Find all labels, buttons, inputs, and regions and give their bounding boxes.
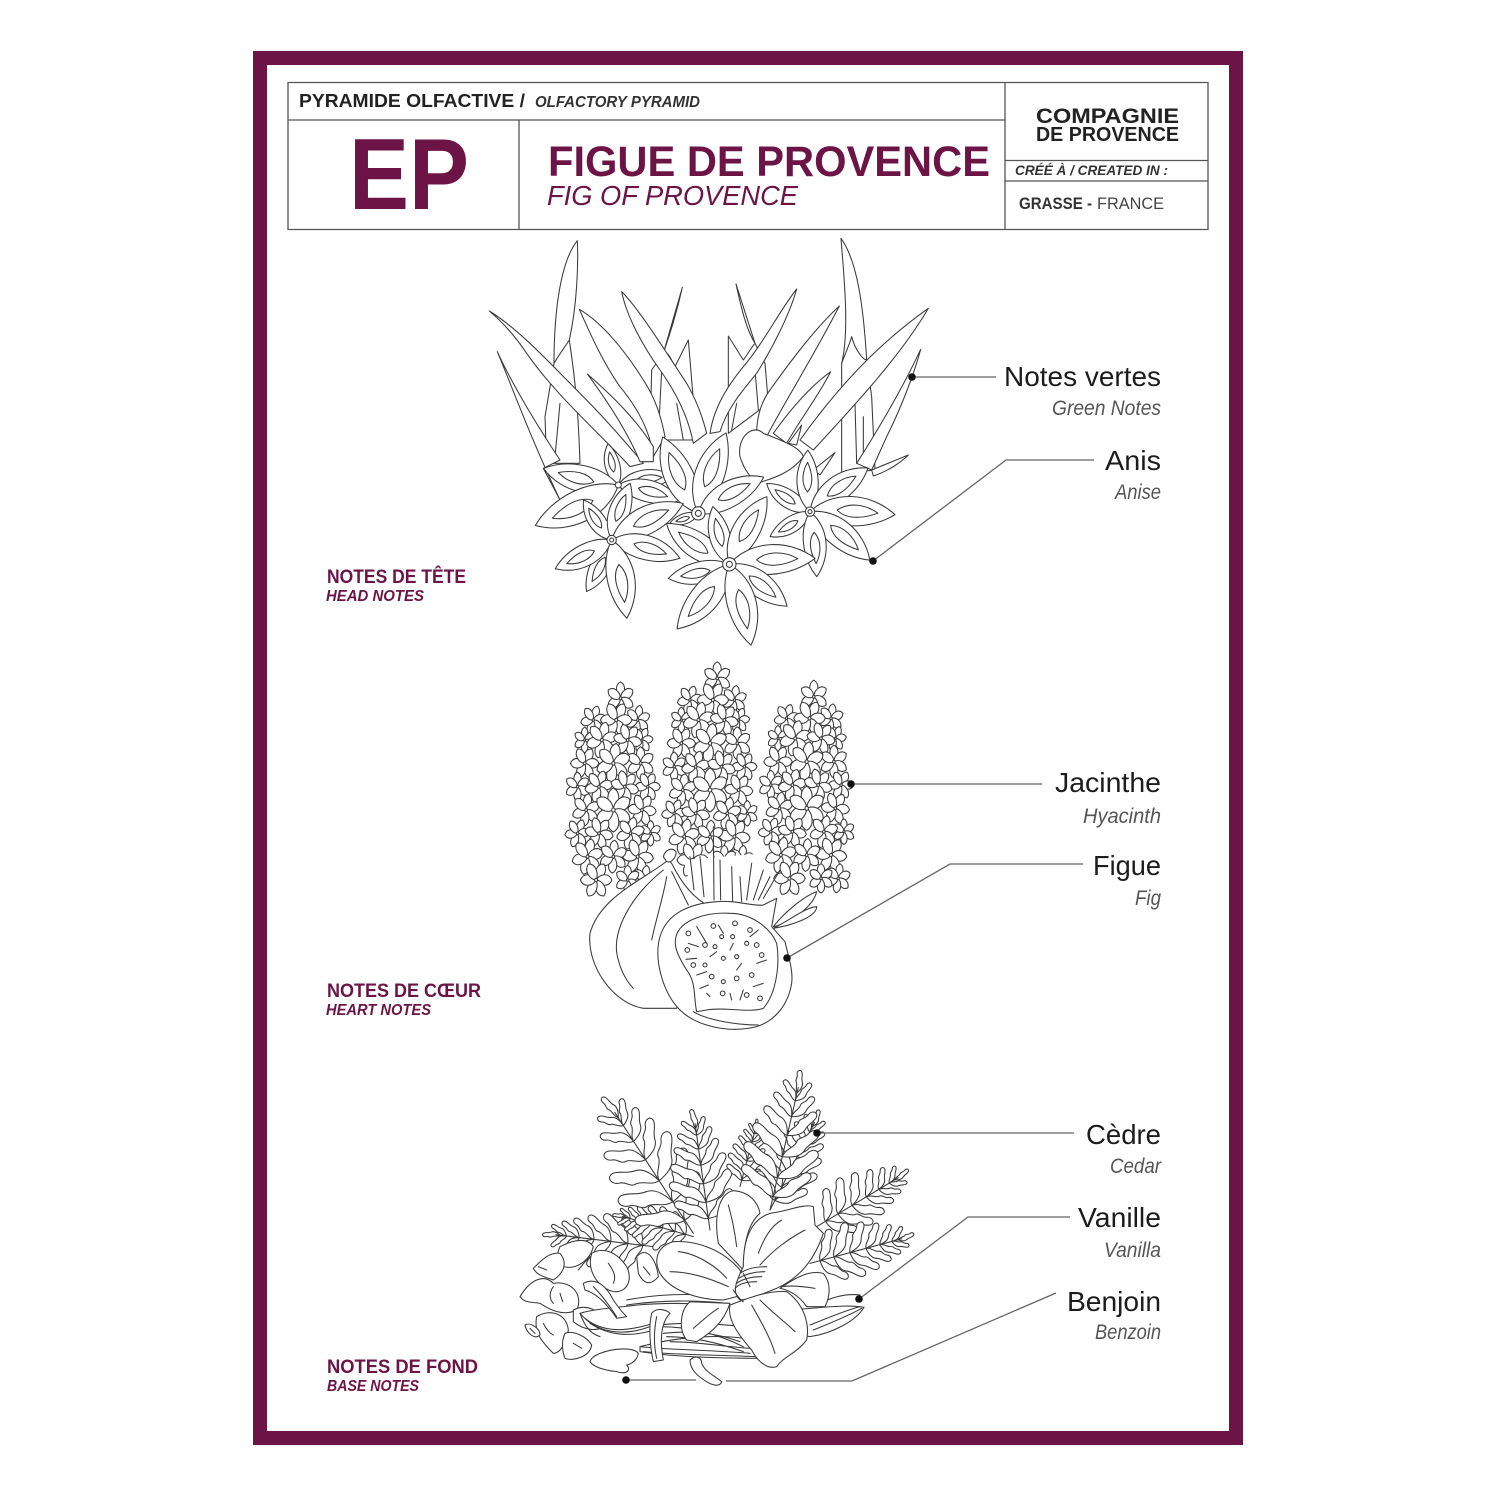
brand name <box>1036 105 1179 146</box>
callout: vanille: Vanille <box>1078 1202 1161 1233</box>
perfume title: FIG OF PROVENCE <box>547 180 798 211</box>
illustration: hyacinth and fig <box>561 662 858 1029</box>
whole fig <box>590 849 710 1008</box>
callout: anis: Anis <box>1105 445 1161 476</box>
section label: heart notes: NOTES DE CŒUR <box>327 981 481 1002</box>
header label: olfactory pyramid: PYRAMIDE OLFACTIVE / <box>299 91 525 111</box>
star anise upper petals blob <box>740 430 803 483</box>
callout: benjoin <box>622 1286 1161 1384</box>
vanilla flower <box>657 1191 829 1367</box>
illustration: cedar, vanilla and benzoin <box>520 1061 925 1385</box>
callout: benjoin: Benjoin <box>1067 1286 1161 1317</box>
origin: GRASSE - <box>1019 194 1092 213</box>
perfume title: FIGUE DE PROVENCE <box>548 138 990 186</box>
benzoin resin chunks <box>520 1240 658 1373</box>
front leaves <box>489 289 928 500</box>
cut fig <box>658 898 792 1029</box>
fig sepals <box>773 892 817 928</box>
monogram EP: EP <box>349 119 469 231</box>
cedar fronds <box>539 1061 925 1293</box>
star anise left back <box>529 442 683 542</box>
callout: jacinthe: Hyacinth <box>1083 805 1161 828</box>
callout: notes vertes: Green Notes <box>1052 397 1161 420</box>
callout: figue: Figue <box>1093 850 1161 881</box>
hyacinth spikes <box>561 662 858 905</box>
brand name: COMPAGNIE <box>1036 105 1179 128</box>
callout: cedre <box>813 1119 1162 1178</box>
section label: head notes: NOTES DE TÊTE <box>327 566 466 588</box>
header table <box>288 82 1208 231</box>
callout: jacinthe <box>847 767 1161 828</box>
header label: olfactory pyramid <box>299 91 700 111</box>
callout: anis <box>869 445 1161 565</box>
illustration: green notes and star anise <box>489 238 928 648</box>
section label: head notes: HEAD NOTES <box>326 588 424 605</box>
callout: notes vertes <box>908 361 1161 420</box>
origin <box>1019 194 1164 213</box>
section label: heart notes: HEART NOTES <box>326 1002 431 1019</box>
callout: cedre: Cèdre <box>1086 1119 1161 1150</box>
back leaves <box>545 238 875 473</box>
callout: benjoin: Benzoin <box>1095 1321 1161 1344</box>
section label: head notes <box>326 566 466 605</box>
callout: notes vertes: Notes vertes <box>1004 361 1161 392</box>
perfume title <box>547 138 990 211</box>
callout: cedre: Cedar <box>1110 1155 1162 1178</box>
callout: vanille: Vanilla <box>1104 1239 1161 1262</box>
star anise front <box>658 489 816 648</box>
star anise right <box>761 450 896 578</box>
callout: vanille <box>855 1202 1161 1303</box>
brand name: DE PROVENCE <box>1036 124 1179 146</box>
callout: figue <box>783 850 1161 962</box>
callout: jacinthe: Jacinthe <box>1055 767 1161 798</box>
section label: heart notes <box>326 981 481 1019</box>
hyacinth stems <box>683 827 780 907</box>
star anise left front <box>551 480 689 620</box>
callout: anis: Anise <box>1113 481 1161 504</box>
section label: base notes <box>327 1357 478 1395</box>
header label: olfactory pyramid: OLFACTORY PYRAMID <box>535 94 700 111</box>
page frame <box>260 58 1236 1438</box>
callout: figue: Fig <box>1135 887 1161 910</box>
star anise centre <box>648 428 769 529</box>
origin: FRANCE <box>1097 194 1164 213</box>
created in label: CRÉÉ À / CREATED IN : <box>1015 162 1168 178</box>
vanilla pods <box>578 1257 864 1385</box>
section label: base notes: NOTES DE FOND <box>327 1357 478 1378</box>
section label: base notes: BASE NOTES <box>327 1378 419 1395</box>
